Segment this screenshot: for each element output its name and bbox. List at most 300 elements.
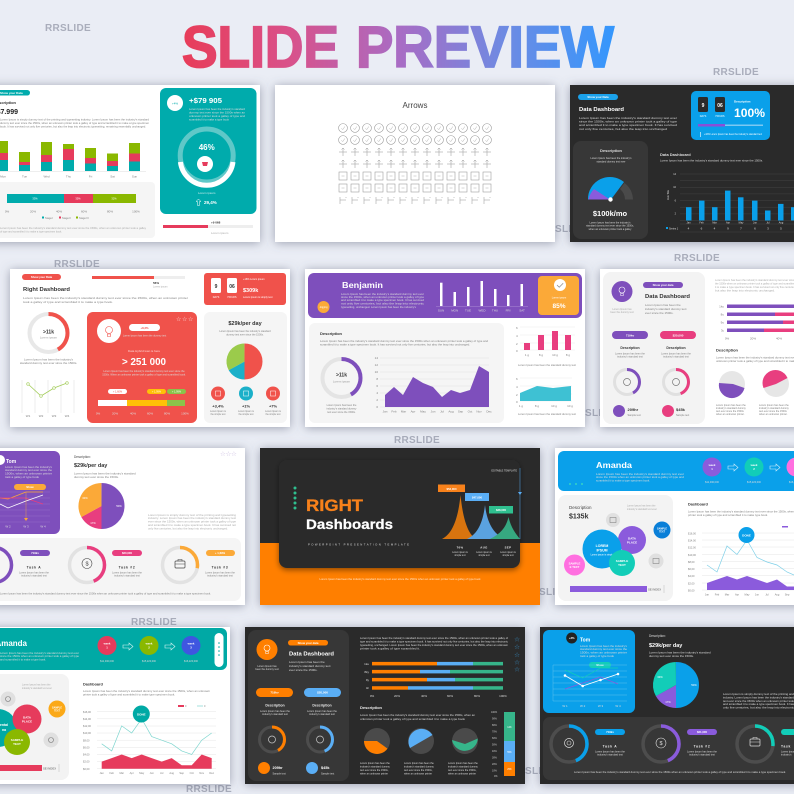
stacked bar chart bbox=[0, 141, 146, 178]
description bbox=[716, 348, 794, 363]
pink bar chart: 1 g bbox=[525, 353, 529, 357]
pie panel: Lorem Ipsum is bbox=[210, 410, 227, 413]
panel: bubble cluster: PLACE bbox=[22, 720, 32, 724]
panel: tasks: $20,000 bbox=[122, 551, 132, 555]
body text: and scrambled it to make a type specimen book. It has survived bbox=[579, 123, 677, 127]
description: Description bbox=[360, 705, 383, 710]
sidebar: Lorem Ipsum has bbox=[612, 308, 632, 311]
heading: Arrows bbox=[403, 101, 427, 110]
red highlight card: ☆ bbox=[176, 316, 181, 323]
line and area chart: $12,00 bbox=[83, 724, 91, 728]
heading bbox=[649, 634, 711, 658]
line and area chart: Aug bbox=[169, 771, 175, 775]
sidebar: $20,000 bbox=[317, 691, 328, 695]
line and area chart: $4,00 bbox=[688, 574, 695, 578]
sidebar: $45k bbox=[676, 407, 686, 412]
panel: tasks: Lorem Ipsum has been the bbox=[595, 750, 625, 754]
teal header: and scrambled it to make a type book. bbox=[0, 658, 46, 662]
blue chart card: took a galley of type book bbox=[580, 655, 615, 658]
text block: and scrambled it to make a type specimen book. It has survived not bbox=[148, 523, 236, 527]
red highlight card: + 1,99% bbox=[172, 390, 182, 394]
line and area chart: printer took a galley of type and scrambled it to make type book. bbox=[688, 513, 768, 517]
sidebar: Data Dashboard bbox=[645, 294, 690, 300]
progress bar: 56% bbox=[153, 281, 159, 285]
teal header: $11,490,000 bbox=[100, 660, 114, 663]
line and area chart: Sep bbox=[785, 592, 790, 596]
sidebar bbox=[603, 272, 705, 424]
horizontal stacked bars: 60% bbox=[447, 694, 453, 698]
red highlight card: +8,2% bbox=[140, 326, 149, 330]
stars: ☆ bbox=[226, 450, 232, 458]
bar chart: 10 bbox=[673, 186, 677, 189]
stacked bar chart: Sat bbox=[110, 174, 115, 178]
panel: bubble cluster: TEXT bbox=[13, 742, 21, 746]
purple chart card: Show bbox=[26, 485, 35, 489]
pink bar chart bbox=[516, 326, 576, 367]
blue chart card: 1500s, when an unknown printer bbox=[580, 652, 627, 654]
pie charts: text ever since the 1500s bbox=[716, 410, 745, 413]
panel: tasks: $ bbox=[85, 562, 89, 568]
watermarks: RRSLIDE bbox=[713, 67, 759, 78]
teal stat card: +$79 905 bbox=[189, 98, 222, 105]
teal header: 1 bbox=[106, 646, 108, 650]
dark card bbox=[279, 460, 520, 568]
panel: area chart: Jul bbox=[440, 410, 444, 414]
panel: stacked percent bar: Stage II bbox=[62, 216, 71, 220]
panel: tasks: Task #2 bbox=[694, 744, 710, 748]
line and area chart: $12,00 bbox=[688, 546, 696, 550]
stacked bar chart: Thu bbox=[66, 174, 71, 178]
panel: bubble cluster: SAMPLE bbox=[11, 738, 23, 742]
stacked column: 20% bbox=[492, 763, 498, 766]
donut chart: Lorem Ipsum has been the industry's bbox=[24, 358, 74, 362]
pie charts bbox=[716, 370, 790, 416]
sidebar: Lorem Ipsum has been the bbox=[615, 352, 645, 356]
panel: tasks: industry's standard text bbox=[114, 574, 140, 578]
line and area chart: $4,00 bbox=[83, 752, 90, 756]
bar chart: 4 bbox=[688, 226, 690, 230]
purple chart card: standard dummy text ever since the bbox=[5, 469, 53, 472]
sidebar: been the dummy text bbox=[610, 311, 634, 314]
blue countdown card: +16% Lorem Ipsum has been the industry's standard text bbox=[704, 133, 762, 136]
panel: bubble cluster: Lorem ipsum is simple bbox=[591, 554, 614, 556]
sidebar: 719kv bbox=[626, 333, 635, 337]
red highlight card: 100% bbox=[181, 412, 189, 416]
sidebar: industry's standard text bbox=[262, 713, 288, 716]
panel: area chart: Sep bbox=[458, 410, 463, 414]
text block bbox=[360, 636, 508, 650]
panel: tasks: 719kv bbox=[31, 551, 39, 555]
text block bbox=[715, 278, 794, 292]
line and area chart: $8,00 bbox=[688, 560, 695, 564]
horizontal stacked bars: 8ky bbox=[364, 670, 369, 674]
body text: not only five centuries, but also the leap into unchanged bbox=[579, 127, 667, 131]
panel: area chart: 14 bbox=[375, 356, 378, 360]
title: SLIDE bbox=[182, 15, 339, 80]
text block: only five centuries, but also the leap into electronic bbox=[723, 706, 794, 710]
line and area chart: Nov bbox=[199, 771, 205, 775]
mountain chart: simple text bbox=[503, 554, 514, 557]
title bbox=[182, 15, 614, 80]
panel: tasks: $21,000 bbox=[697, 730, 707, 734]
panel: area chart: text ever since the 1500s. bbox=[327, 411, 356, 414]
pie charts: Lorem Ipsum has been the bbox=[716, 404, 746, 407]
panel: bubble cluster bbox=[0, 674, 69, 780]
pie charts: text ever since the 1500s bbox=[759, 410, 788, 413]
teal area chart: 2 bbox=[516, 393, 518, 397]
panel: stacked percent bar: 33% bbox=[32, 196, 38, 200]
stacked column: 10% bbox=[492, 770, 498, 772]
bar chart: May bbox=[739, 222, 744, 224]
orange score box bbox=[538, 276, 579, 315]
purple chart card: 1500s, when an unknown printer bbox=[5, 472, 52, 476]
icon grid bbox=[337, 122, 493, 206]
panel: tasks bbox=[543, 717, 794, 780]
panel: bubble cluster: TEXT bbox=[618, 563, 626, 567]
sidebar bbox=[248, 630, 349, 781]
panel: stacked percent bar: 20% bbox=[30, 210, 36, 214]
cover title: Dashboards bbox=[306, 516, 393, 532]
blue countdown card: DAYS bbox=[700, 115, 707, 118]
panel: area chart: >11k bbox=[336, 372, 347, 378]
pie panel: +7% bbox=[269, 404, 277, 408]
bar chart: Lorem Ipsum has been the industry's standard dummy text ever since the 1500s. bbox=[660, 158, 763, 162]
blue countdown card: 100% bbox=[734, 106, 765, 120]
bar chart: Jul bbox=[766, 222, 770, 224]
line and area chart: $0,00 bbox=[688, 588, 695, 592]
panel: bubble cluster: Lorem Ipsum has been the bbox=[22, 684, 51, 686]
panel: tasks: industry's standard text bbox=[689, 754, 715, 756]
heading: dummy text ever since the 1500s. bbox=[649, 654, 694, 658]
sidebar: Show your data bbox=[653, 283, 674, 287]
line and area chart: Feb bbox=[109, 771, 114, 775]
bar chart: Aug bbox=[779, 222, 784, 224]
mountain chart bbox=[438, 468, 522, 557]
line and area chart: Dashboard bbox=[83, 682, 104, 686]
red countdown card: HOURS bbox=[227, 296, 237, 299]
blue header: 2 bbox=[753, 467, 755, 471]
sidebar: Lorem Ipsum has been the bbox=[289, 660, 325, 664]
panel: area chart: Oct bbox=[468, 410, 472, 414]
line and area chart: Oct bbox=[190, 771, 194, 775]
description bbox=[360, 705, 475, 721]
blue header: week bbox=[750, 463, 758, 467]
blue chart card bbox=[543, 630, 635, 713]
pie chart bbox=[657, 669, 697, 704]
teal stat card: +4% bbox=[172, 102, 178, 106]
stars: ☆ bbox=[220, 450, 226, 458]
watermarks: RRSLIDE bbox=[510, 766, 556, 777]
panel: area chart: Feb bbox=[391, 410, 397, 414]
teal area chart: Lorem Ipsum has been the standard dummy text bbox=[518, 412, 576, 416]
heading: dummy text ever since the 1500s. bbox=[74, 475, 119, 479]
line and area chart: May bbox=[745, 592, 750, 596]
data pill bbox=[0, 90, 30, 96]
panel: tasks: + 1,69% bbox=[215, 551, 226, 555]
pie panel: the simple text bbox=[239, 413, 254, 416]
body text: Lorem Ipsum is simply dummy text of the printing and typesetting industry. Lorem Ipsum has been the industry's standard bbox=[0, 118, 149, 122]
line and area chart: 0 bbox=[204, 705, 206, 708]
panel: slide 7 Tom purple bbox=[0, 448, 245, 605]
red highlight card: + 1,99% bbox=[152, 390, 162, 394]
red countdown card: $309k bbox=[243, 288, 259, 294]
panel: stacked percent bar bbox=[0, 182, 155, 238]
pie panel: +3,4% bbox=[212, 404, 224, 408]
horizontal stacked bars: 0% bbox=[725, 336, 729, 340]
panel: bubble cluster: LOREM bbox=[596, 544, 608, 548]
panel: tasks: Lorem Ipsum has been the bbox=[205, 572, 235, 574]
teal header bbox=[0, 628, 227, 670]
line and area chart: Jan bbox=[100, 771, 104, 775]
stacked column: 90% bbox=[492, 718, 498, 720]
purple header: since the 1500s, when an unknown printer took a galley of type bbox=[341, 296, 425, 299]
line and area chart: DONE bbox=[137, 712, 146, 716]
mountain chart: AUG bbox=[480, 546, 488, 550]
pie charts: industry's standard dummy bbox=[716, 407, 747, 410]
stacked column: 30% bbox=[492, 756, 498, 760]
mountain chart: $38,000 bbox=[496, 508, 506, 512]
red highlight card: 60% bbox=[147, 412, 153, 416]
horizontal stacked bars: 20% bbox=[750, 336, 756, 340]
pink bar chart: Lorem Ipsum has been the standard dummy text bbox=[518, 363, 576, 367]
text block: type and scrambled it to make a type specimen book. It has survived not only five centuries, but also the leap into electronic bbox=[360, 640, 508, 644]
line and area chart: $16,00 bbox=[688, 532, 696, 536]
panel: stacked percent bar: 60% bbox=[81, 210, 87, 214]
blue header: week bbox=[708, 463, 716, 467]
sidebar: Lorem Ipsum has bbox=[257, 665, 277, 668]
progress bar: Lorem ipsum bbox=[153, 286, 167, 288]
gauge panel: standard dummy text ever bbox=[597, 160, 626, 164]
line and area chart: $14,00 bbox=[83, 717, 91, 721]
line and area chart: Mar bbox=[725, 592, 729, 596]
panel: bubble cluster: na bbox=[2, 728, 6, 732]
purple header: THU bbox=[492, 308, 498, 312]
teal area chart: 1 g bbox=[519, 404, 523, 408]
heading bbox=[0, 100, 18, 116]
text block: Lorem Ipsum has been the industry's standard dummy text ever since the 1500s, when an unknown printer took a galley of bbox=[360, 636, 508, 640]
stacked bar chart: Fri bbox=[89, 174, 93, 178]
line and area chart: $2,00 bbox=[688, 582, 695, 586]
pie charts: text ever since the 1500s, bbox=[448, 769, 477, 772]
caption: Lorem Ipsum has been the industry's standard dummy text ever since the 1500s when an unknown printer took a galley of type book bbox=[320, 577, 481, 581]
teal area chart: 4 bbox=[516, 385, 518, 389]
pie charts: text ever since the 1500s, bbox=[404, 769, 433, 772]
line chart bbox=[22, 380, 74, 418]
mountain chart: simple text bbox=[479, 554, 490, 557]
sidebar: Data Dashboard bbox=[289, 652, 334, 658]
sidebar: Lorem Ipsum has been the bbox=[307, 710, 337, 713]
pie panel: +1% bbox=[242, 404, 250, 408]
line and area chart: Mar bbox=[119, 771, 124, 775]
horizontal stacked bars: 40% bbox=[421, 694, 427, 698]
pie panel: dummy text ever since the 1500s. bbox=[226, 334, 264, 336]
bar chart: 6 bbox=[754, 226, 756, 230]
pie panel bbox=[204, 312, 287, 423]
line and area chart bbox=[688, 502, 794, 596]
panel: area chart: industry's standard dummy bbox=[327, 408, 357, 410]
bar chart: Jan bbox=[686, 222, 691, 224]
sidebar: industry's standard dummy text bbox=[645, 307, 687, 311]
panel: bubble cluster: IPSUM bbox=[596, 548, 608, 552]
blue header: Lorem Ipsum has been the industry's standard dummy text ever bbox=[596, 473, 684, 476]
body text: took a galley of type and scrambled it to make a type book. bbox=[23, 300, 113, 304]
text block bbox=[723, 692, 794, 710]
orange score box: Lorem ipsum bbox=[552, 296, 566, 300]
red highlight card: 20% bbox=[112, 412, 118, 416]
gauge panel: Description bbox=[600, 148, 623, 153]
cover title bbox=[306, 496, 409, 546]
pie charts: when an unknown printer. bbox=[759, 413, 788, 416]
panel: area chart: scrambled it to make a type specimen book. It has survived not only five centuries, but also the leap into unchanged. bbox=[320, 342, 470, 346]
sidebar: Show your data bbox=[298, 641, 319, 645]
bar chart: 6 bbox=[675, 200, 677, 202]
panel: area chart: 12 bbox=[375, 363, 378, 367]
panel: tasks: industry's standard text bbox=[207, 574, 233, 578]
panel: bubble cluster: SAMPLE bbox=[657, 528, 667, 530]
panel: area chart: 4 bbox=[376, 391, 378, 395]
pie panel: the simple text bbox=[266, 413, 281, 416]
body text bbox=[579, 116, 677, 131]
pie panel: Lorem Ipsum is bbox=[265, 410, 282, 413]
watermarks: RRSLIDE bbox=[524, 587, 570, 598]
panel: bubble cluster: PLACE bbox=[627, 540, 637, 544]
purple header: typesetting, unchanged. Lorem Ipsum has been the industry's bbox=[341, 306, 417, 309]
panel: bubble cluster: DATA bbox=[23, 716, 32, 720]
body text: Lorem Ipsum has been the industry's standard dummy text ever since the 1500s, when an unknown printer bbox=[23, 296, 188, 300]
line and area chart: Dec bbox=[209, 771, 215, 775]
sidebar: 209hr bbox=[272, 766, 283, 770]
pie charts: Lorem Ipsum has been the bbox=[448, 762, 478, 765]
heading: Description: bbox=[649, 634, 666, 638]
heading: $29k/per day bbox=[74, 463, 108, 469]
blue header: since the 1500s when an unknown printer took a galley of type and bbox=[596, 476, 685, 479]
bar chart: Apr bbox=[726, 222, 730, 224]
teal header: Lorem Ipsum has been the industry's standard dummy text ever bbox=[0, 652, 79, 655]
stacked column: 80% bbox=[492, 724, 498, 727]
pink bar chart: 0 bbox=[516, 349, 518, 353]
panel: area chart: 6 bbox=[376, 384, 378, 388]
line and area chart: $14,00 bbox=[688, 538, 696, 542]
heading: Lorem Ipsum has been the industry's standard bbox=[649, 650, 711, 654]
panel: bubble cluster: industry's standard text ever bbox=[22, 687, 52, 690]
purple chart card bbox=[0, 451, 60, 534]
data pill bbox=[22, 274, 61, 280]
horizontal stacked bars bbox=[364, 662, 507, 698]
gauge panel: Lorem Ipsum has been the industry's bbox=[591, 157, 632, 160]
sidebar: industry's standard dummy text bbox=[289, 664, 331, 668]
pie chart: 33% bbox=[657, 675, 663, 679]
watermarks: RRSLIDE bbox=[54, 259, 100, 270]
heading: Right Dashboard bbox=[23, 287, 70, 293]
pie charts: Lorem Ipsum has been the bbox=[360, 762, 390, 765]
blue header: scrambled it to make a type specimen book. bbox=[596, 480, 650, 482]
sidebar: Lorem Ipsum has been the bbox=[645, 303, 681, 307]
mountain chart: Lorem ipsum is bbox=[452, 551, 469, 554]
horizontal stacked bars: 80% bbox=[474, 694, 480, 698]
blue chart card: W 1 bbox=[562, 704, 568, 708]
panel: stacked percent bar: 35% bbox=[75, 196, 81, 200]
pie chart: 50% bbox=[116, 504, 122, 508]
mountain chart: $47,000 bbox=[472, 496, 482, 500]
line and area chart: Jul bbox=[765, 592, 769, 596]
sidebar: Sample text bbox=[321, 772, 335, 776]
horizontal stacked bars: 1ku bbox=[719, 304, 724, 308]
panel: bubble cluster: TEXT bbox=[54, 710, 61, 712]
teal header: week bbox=[145, 642, 153, 646]
body text bbox=[0, 118, 149, 128]
watermarks: RRSLIDE bbox=[540, 224, 586, 235]
pie charts bbox=[360, 728, 479, 776]
panel: area chart: Lorem ipsum bbox=[333, 380, 351, 384]
red countdown card bbox=[204, 273, 286, 305]
panel: area chart: Nov bbox=[476, 410, 482, 414]
line and area chart: Sep bbox=[179, 771, 185, 775]
purple header: Lorem Ipsum has been the industry's standard dummy text ever bbox=[341, 293, 424, 296]
purple header: SAT bbox=[519, 308, 525, 312]
pie charts: when an unknown printer. bbox=[716, 413, 745, 416]
stacked column: 60% bbox=[492, 737, 498, 740]
red highlight card: ☆ bbox=[182, 316, 187, 323]
horizontal stacked bars: 3c bbox=[721, 328, 724, 332]
line and area chart: $16,00 bbox=[83, 710, 91, 714]
pink bar chart: 8 g bbox=[539, 353, 543, 357]
gauge panel: standard dummy text ever since the 1500s, bbox=[586, 224, 634, 228]
panel: bubble cluster: SAMPLE bbox=[52, 706, 62, 710]
bar chart: Jun bbox=[753, 222, 758, 224]
pie charts: industry's standard dummy bbox=[360, 766, 391, 768]
orange base bbox=[260, 543, 540, 605]
panel: stacked percent bar: 40% bbox=[56, 210, 62, 214]
sidebar: been the dummy text bbox=[255, 668, 279, 671]
red countdown card: +16% Lorem ipsum bbox=[243, 278, 265, 281]
pie charts: when an unknown printer bbox=[448, 772, 476, 776]
blue countdown card: Description bbox=[734, 100, 751, 104]
gauge panel: Lorem Ipsum has been the industry's bbox=[590, 222, 631, 224]
bar chart: Mar bbox=[712, 222, 717, 224]
pie charts: Lorem Ipsum has been the bbox=[759, 404, 789, 407]
teal area chart: 6 bbox=[516, 377, 518, 381]
sidebar: $45k bbox=[321, 766, 330, 770]
line and area chart: $8,00 bbox=[83, 738, 90, 742]
line and area chart: $0,00 bbox=[83, 767, 90, 771]
purple chart card: W 2 bbox=[5, 524, 11, 528]
teal stat card: Lorem Ipsum has been the industry's standard bbox=[189, 107, 245, 111]
description: unknown printer took a galley of type and scrambled it to make a type book bbox=[360, 717, 466, 721]
watermarks: RRSLIDE bbox=[394, 435, 440, 446]
panel: tasks: Lorem Ipsum has been the bbox=[687, 750, 717, 754]
stacked column: 25K bbox=[507, 768, 512, 771]
teal area chart: 0 bbox=[516, 400, 518, 404]
stacked column: 100% bbox=[491, 711, 498, 714]
line chart: W3 bbox=[52, 414, 57, 418]
purple header: FRI bbox=[506, 308, 511, 312]
bar chart: Axis Title bbox=[667, 189, 670, 200]
pink bar chart: 6 bbox=[516, 326, 518, 330]
stars: ☆ bbox=[514, 666, 520, 674]
line chart: W2 bbox=[39, 414, 44, 418]
panel: area chart: Dec bbox=[486, 410, 492, 414]
sidebar: 209hr bbox=[628, 407, 639, 412]
bar chart: 3 bbox=[767, 226, 769, 230]
cover title: POWERPOINT PRESENTATION TEMPLATE bbox=[308, 542, 409, 546]
watermarks: RRSLIDE bbox=[45, 23, 91, 34]
sidebar: Description bbox=[312, 704, 332, 708]
panel: slide 6 data dashboard purple pink bbox=[600, 269, 794, 427]
text block: but also the leap into electronic unchanged. bbox=[715, 288, 775, 292]
data pill: Show your Data bbox=[0, 91, 23, 95]
teal header: since the 1500s when an unknown printer took a galley of type bbox=[0, 655, 80, 658]
data pill bbox=[578, 94, 618, 100]
